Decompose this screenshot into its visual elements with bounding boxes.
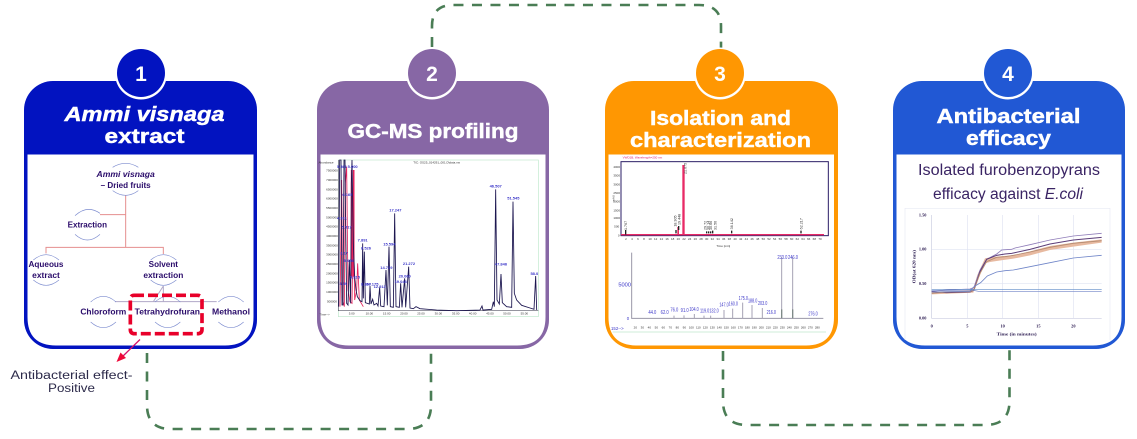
heading: Isolation and characterization [630,108,811,152]
axis labels: 30.00 [435,312,442,316]
chart: GC-MS chromatogram [318,160,539,317]
text: antibacterial effect positive: Positive [48,383,95,395]
axis labels: 1.50 [919,212,926,217]
axis labels: 44 [745,237,748,241]
axis labels: 15.00 [383,312,391,316]
axis labels: 58 [784,237,788,241]
axis labels: 3000000 [326,253,338,257]
axis labels: 64 [801,237,805,241]
flowchart labels: – Dried fruits [101,181,151,190]
chart: mass spectrum: 120 [703,325,708,329]
peak labels: 6.165 [342,192,353,197]
chart: mass spectrum: 50 [655,325,658,329]
chart: mass spectrum: 190 [752,325,757,329]
heading: Isolation and characterization: characterization [630,130,811,152]
axis labels [911,212,1075,337]
axis labels: 3000 [613,182,620,186]
axis labels: 2500000 [326,262,338,266]
axis labels: 3500000 [326,243,338,247]
axis labels: 26 [694,237,697,241]
chart: mass spectrum: 104.0 [689,307,699,313]
axis labels: 5.00 [349,312,355,316]
axis labels: 28 [699,237,703,241]
chart: mass spectrum: 132.0 [709,309,719,315]
peak labels: 21.272 [403,261,416,266]
peak labels: 47.846 [495,261,508,266]
chart: mass spectrum: 160.0 [729,302,738,308]
axis labels: 56 [779,237,782,241]
axis labels: Time (in minutes) [997,332,1037,337]
axis labels: 0 [618,233,620,237]
axis labels: 12 [654,237,658,241]
chart: mass spectrum: 147.0 [719,303,729,309]
chart: mass spectrum: 220 [773,325,778,329]
axis labels: 1500000 [326,281,338,285]
chart: mass spectrum: 170 [738,325,743,329]
chart: mass spectrum: 80 [676,325,679,329]
peak labels [624,163,803,230]
panel: Antibacterial efficacy [893,81,1125,349]
chart: mass spectrum: 230 [780,325,785,329]
peak labels: 3.17 [340,251,349,256]
flowchart labels: Aqueous [28,260,64,269]
peak labels: 5.056 [344,258,354,263]
axis labels: 66 [807,237,811,241]
heading: Ammi visnaga extract: Ammi visnaga [63,104,224,126]
axis labels: 36 [722,237,726,241]
axis labels: 50.00 [503,312,511,316]
chart: mass spectrum: 246.0 [788,255,798,261]
peak labels: 29.72 [704,221,708,230]
badge: step 3 [694,48,746,100]
axis labels: 4500000 [326,225,338,229]
peak labels: 14.729 [380,265,393,270]
peak labels: 19.448 [677,214,681,225]
peak labels: 5.361 [337,164,348,169]
chart: mass spectrum: 119.0 [700,309,709,315]
peak labels: 18.305 [674,215,678,227]
axis labels: 20.00 [400,312,408,316]
axis labels: 10.00 [366,312,373,316]
axis labels: 68 [813,237,816,241]
axis labels: 52 [767,237,771,241]
chart: HPLC chromatogram: VWD1B, Wavelength=250 nm [623,155,663,159]
axis labels: 1000 [613,216,620,220]
peak labels: 10.175 [366,281,379,286]
flowchart labels [28,170,250,317]
peak labels: 30.66 [709,221,713,230]
peak labels: 8.867 [361,282,372,287]
peak labels: 5.000 [348,164,358,169]
text: efficacy description: efficacy against E.coli [933,186,1084,203]
axis labels: 500 [614,225,619,229]
axis labels: 40 [733,237,737,241]
text: efficacy description: Isolated furobenzopyrans [918,162,1100,179]
peak labels: 15.594 [383,242,396,247]
panel: Isolation and characterization [605,81,838,349]
chart: mass spectrum: 276.0 [808,312,818,318]
axis labels: 38 [728,237,731,241]
axis labels: 48 [756,237,760,241]
badge: step 3: 3 [714,63,726,86]
chart: mass spectrum: 110 [696,325,701,329]
heading: Antibacterial efficacy: Antibacterial [936,106,1080,128]
chart: mass spectrum: 270 [808,325,813,329]
axis labels: 3500 [613,174,620,178]
axis labels: 20 [677,237,680,241]
axis labels: 0 [931,323,933,328]
axis labels: 6 [637,237,639,241]
chart: mass spectrum: 140 [717,325,722,329]
flowchart labels: extraction [143,271,183,280]
axis labels: 60 [790,237,794,241]
peak labels: 19.048 [395,279,408,284]
axis labels: 30 [705,237,709,241]
axis labels: 2 [625,237,627,241]
flowchart labels: Solvent [149,260,178,269]
axis labels: 1.00 [919,247,926,252]
panel: GC-MS profiling [317,81,549,349]
axis labels: 15 [1036,323,1040,328]
peak labels: 8.526 [361,246,372,251]
peak labels: 12.913 [374,284,387,289]
badge: step 2: 2 [426,63,438,86]
chart: mass spectrum: 260 [801,325,806,329]
axis labels: 6000000 [326,197,338,201]
axis labels: 25.00 [417,312,425,316]
text: antibacterial effect positive [10,370,133,395]
axis labels: 2500 [613,191,620,195]
badge: step 2 [406,48,458,100]
badge: step 4: 4 [1002,63,1014,86]
axis labels: 1500 [613,208,620,212]
chart: mass spectrum: 62.0 [661,310,669,316]
text: efficacy description [918,162,1100,203]
axis labels: 40.00 [469,312,477,316]
badge: step 1 [115,48,167,100]
axis labels: Time--> [320,313,330,317]
axis labels: 22 [682,237,686,241]
peak labels: 5.815 [350,275,361,280]
axis labels: Abundance [318,160,334,164]
peak labels: 5.517 [342,225,352,230]
peak labels: 46.507 [490,184,503,189]
axis labels: 4000 [613,165,620,169]
axis labels: 6500000 [326,187,338,191]
chart: mass spectrum: 30 [641,325,644,329]
flowchart labels: Chloroform [80,308,126,317]
axis labels: TIC: GS25_014291_001.D\data.ms [413,161,461,165]
chart: mass spectrum: 130 [710,325,715,329]
axis labels: Time [min] [716,244,730,248]
axis labels: 18 [671,237,675,241]
flowchart labels: extract [32,271,60,280]
peak labels [337,164,539,289]
chart: mass spectrum: 200 [759,325,764,329]
peak labels: 17.247 [389,207,402,212]
chart: mass spectrum: 5000 [618,283,631,289]
axis labels: 1000000 [326,290,338,294]
peak labels: 51.545 [507,196,520,201]
flowchart labels: Extraction [68,220,107,229]
chart: mass spectrum: 216.0 [767,310,776,316]
panel: Ammi visnaga extract [24,81,257,349]
peak labels: 62.217 [799,218,803,229]
peak labels: 7.891 [358,238,368,243]
flowchart labels: Tetrahydrofuran [135,308,200,317]
flowchart labels: Ammi visnaga [95,170,155,179]
highlight: tetrahydrofuran box [130,295,202,334]
axis labels: 24 [688,237,692,241]
chart: mass spectrum: 160 [731,325,736,329]
peak labels: 3.30 [339,281,348,286]
heading: Antibacterial efficacy: efficacy [966,128,1052,150]
chart: mass spectrum: 280 [815,325,820,329]
chart: mass spectrum [611,253,826,332]
axis labels: 14 [660,237,663,241]
axis labels: 0.00 [919,315,926,320]
axis labels: 46 [750,237,754,241]
peak labels: 21.075 [684,163,688,174]
axis labels: 5000000 [326,215,338,219]
axis labels: 500000 [327,299,337,303]
axis labels: 10 [1001,323,1005,328]
chart: mass spectrum: 70 [669,325,672,329]
axis labels: mAU [612,195,616,202]
axis labels: 35.00 [452,312,460,316]
axis labels: 50 [762,237,765,241]
axis labels: 32 [711,237,714,241]
chart: mass spectrum: 60 [662,325,665,329]
axis labels: 70 [818,237,822,241]
badge: step 1: 1 [135,63,147,86]
chart: mass spectrum: 91.0 [681,308,689,314]
chart: mass spectrum: 175.0 [739,296,748,302]
chart: mass spectrum: 0 [627,316,630,321]
heading: GC-MS profiling: GC-MS profiling [348,121,518,143]
axis labels: 10 [648,237,652,241]
peak labels: 30.14 [706,221,710,230]
chart: mass spectrum: 20 [634,325,637,329]
chart: growth curves [905,208,1110,340]
heading: Ammi visnaga extract [63,104,224,148]
axis labels: 7500000 [326,169,338,173]
peak labels: 58.0 [530,271,539,276]
flowchart: extraction tree [28,163,250,334]
chart: mass spectrum: 210 [766,325,771,329]
axis labels: 54 [773,237,777,241]
badge: step 4 [982,48,1034,100]
axis labels [612,165,822,248]
axis labels: OD(at 620 nm) [911,249,916,283]
connector: step 1 to step 2 [147,353,431,429]
axis labels: 42 [739,237,743,241]
chart: mass spectrum: 240 [787,325,792,329]
heading: Antibacterial efficacy [936,106,1080,150]
chart: mass spectrum: 40 [648,325,651,329]
axis labels: 45.00 [486,312,494,316]
axis labels: 4000000 [326,234,338,238]
chart: mass spectrum: 44.0 [648,310,656,316]
chart: mass spectrum: 76.0 [670,308,678,314]
axis labels: 20 [1071,323,1075,328]
axis labels: 0.50 [919,281,926,286]
connector: step 2 to step 3 [432,5,721,50]
heading: Ammi visnaga extract: extract [104,126,185,148]
chart: mass spectrum: 233.0 [777,255,787,261]
axis labels [318,160,528,317]
peak labels: 31.56 [714,221,718,230]
axis labels: 34 [716,237,720,241]
heading: Isolation and characterization: Isolation and [650,108,791,130]
chart: mass spectrum: 250 [794,325,799,329]
chart: mass spectrum: 188.0 [748,299,757,305]
peak labels: 4.911 [337,215,348,220]
chart: mass spectrum: 90 [683,325,686,329]
text: antibacterial effect positive: Antibacterial effect- [10,370,133,382]
chart: mass spectrum: 203.0 [758,301,767,307]
axis labels: 4 [631,237,633,241]
axis labels: 7000000 [326,178,338,182]
flowchart labels: Methanol [212,308,250,317]
axis labels: 55.00 [521,312,528,316]
axis labels: 2000000 [326,271,338,275]
axis labels: 5500000 [326,206,338,210]
peak labels: 1.767 [624,221,628,230]
axis labels: 5 [966,323,968,328]
chart: HPLC chromatogram [611,155,828,332]
peak labels: 20.060 [399,274,412,279]
chart: mass spectrum: 152--> [611,326,624,331]
axis labels: 62 [796,237,799,241]
peak labels: 36.142 [730,218,734,229]
chart: mass spectrum: 100 [689,325,694,329]
axis labels: 16 [665,237,669,241]
connector: step 3 to step 4 [723,349,1010,425]
chart: mass spectrum: 180 [745,325,750,329]
axis labels: 8 [643,237,645,241]
axis labels: 2000 [613,200,620,204]
chart: mass spectrum: 150 [724,325,729,329]
arrow: to antibacterial effect [116,340,140,362]
